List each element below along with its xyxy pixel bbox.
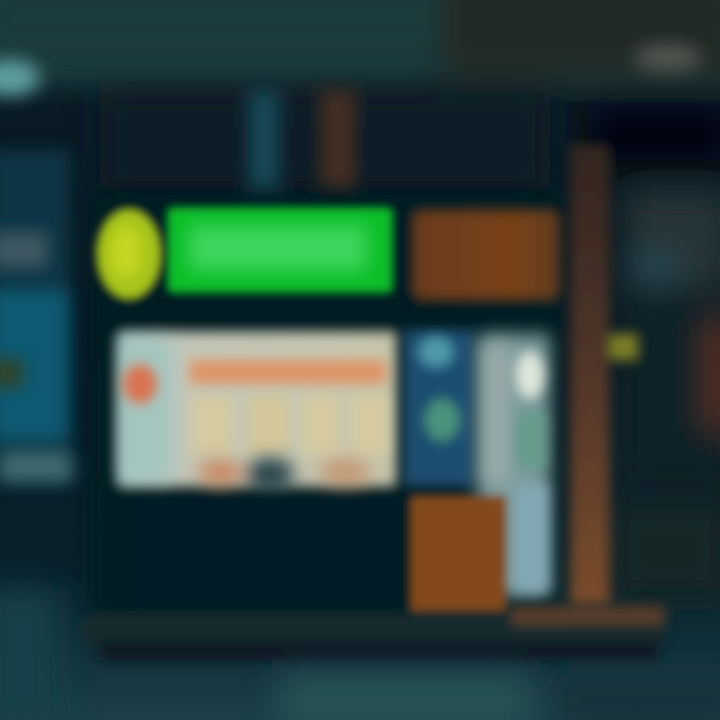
menu bottom items: [198, 457, 371, 491]
yellow tag: [608, 334, 638, 360]
upper columns: [248, 90, 356, 205]
yellow round logo: [97, 209, 161, 299]
menu left teal block: [122, 340, 172, 480]
right background wall: [610, 190, 720, 600]
orange bin: [410, 496, 506, 614]
menu item columns: [192, 396, 388, 454]
sign text glow: [190, 226, 366, 270]
blue side panel: [404, 330, 474, 486]
ceiling light right: [634, 44, 702, 72]
floor platform: [80, 606, 665, 660]
ceiling: [0, 0, 720, 200]
lit menu board: [118, 332, 396, 491]
floor reflections: [0, 590, 720, 720]
ceiling light left: [0, 60, 40, 96]
green sign: [168, 208, 392, 292]
menu header strip: [190, 360, 386, 384]
menu red circle: [123, 364, 157, 404]
left screen panel: [0, 150, 72, 482]
orange sign: [412, 210, 560, 300]
white window: [478, 334, 550, 596]
dark counter: [136, 498, 402, 606]
wooden pillar: [570, 145, 610, 605]
kiosk dark frame: [90, 190, 560, 620]
